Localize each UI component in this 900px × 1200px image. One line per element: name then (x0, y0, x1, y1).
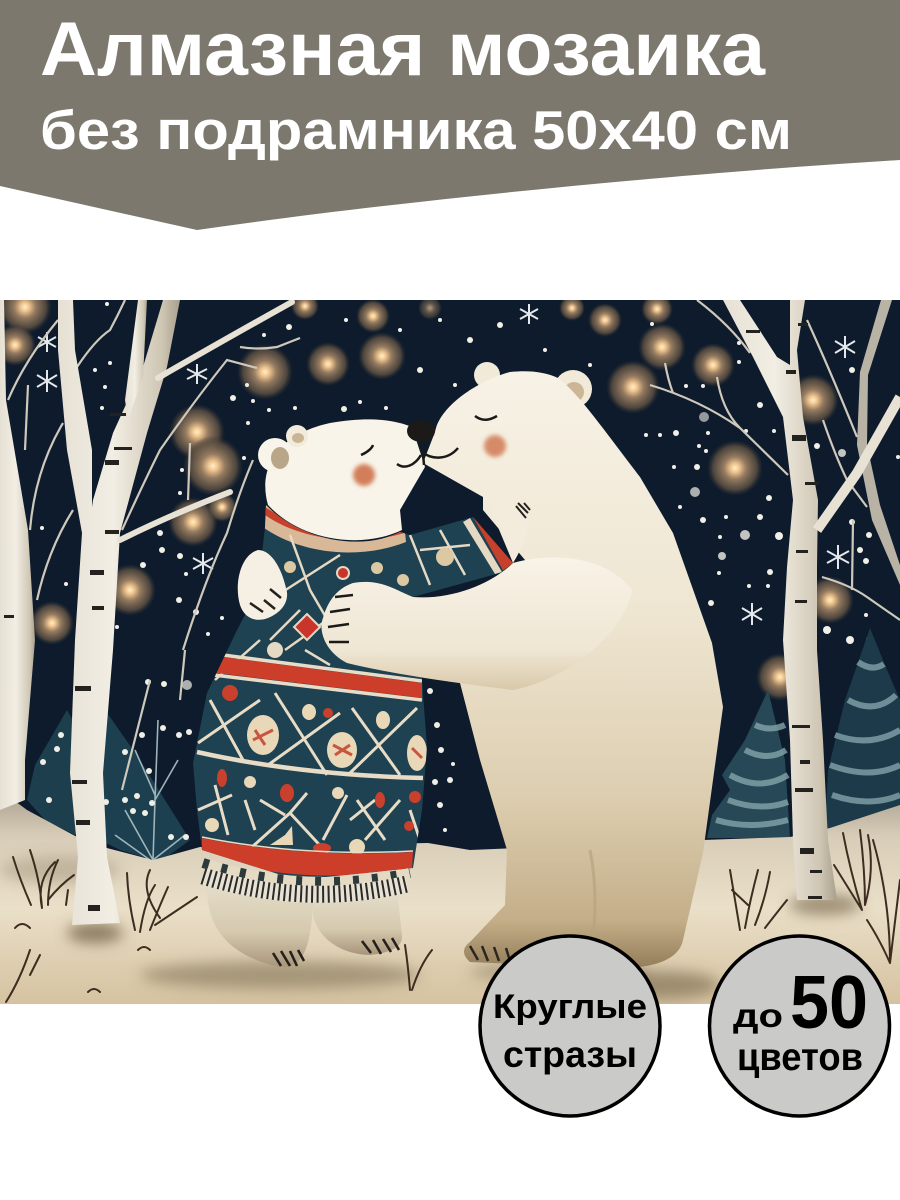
small bear (193, 419, 530, 967)
ground shadows (0, 856, 861, 999)
snowy ground (0, 790, 900, 1004)
red band (216, 657, 422, 698)
sweater hem band (278, 868, 409, 880)
small bear mouth (397, 455, 421, 467)
big bear foot claws (470, 946, 510, 961)
flowers (217, 685, 421, 853)
thick left branches (120, 302, 292, 540)
badge: up to 50 colours: цветов (737, 1036, 863, 1079)
medallions (247, 715, 279, 755)
crossing vines (198, 693, 420, 853)
sweater fringe (203, 876, 407, 894)
thin grey tree (857, 300, 900, 585)
title: Алмазная мозаика (40, 7, 766, 92)
badge: up to 50 colours: до (733, 997, 783, 1034)
big bear paw claws (328, 595, 353, 642)
badge: round rhinestones (480, 936, 660, 1116)
collar (260, 503, 406, 552)
product illustration: two polar bears hugging in a winter forest (0, 280, 900, 1004)
right limb (817, 397, 900, 530)
fir trees (27, 628, 900, 862)
sweater (193, 503, 516, 894)
bare shrubs and twigs (6, 830, 900, 1002)
badge: round rhinestones: Круглые (493, 988, 647, 1026)
bark marks (4, 323, 822, 911)
badge: up to 50 colours (710, 936, 890, 1116)
birch trees (0, 300, 900, 925)
big bear arm (321, 557, 632, 690)
small bear near paw (238, 550, 287, 620)
birch thin branches (8, 300, 900, 790)
lower red band (202, 838, 413, 876)
upper pattern (215, 530, 470, 680)
main left birch (58, 300, 180, 925)
small bear cheek (353, 464, 375, 486)
middle stripe (197, 752, 423, 778)
badge: up to 50 colours: 50 (790, 960, 868, 1044)
subtitle: без подрамника 50х40 см (40, 99, 792, 161)
cuff (473, 517, 513, 570)
main right birch (723, 300, 837, 900)
small bear far paw (498, 528, 519, 563)
snowflakes (37, 304, 855, 625)
big bear body (423, 362, 723, 968)
small bear head (265, 419, 425, 540)
glowing lights (0, 280, 854, 701)
night sky (4, 300, 900, 860)
small bear eye (361, 445, 373, 455)
small bear legs (208, 899, 313, 967)
header banner (0, 0, 900, 230)
falling snow (40, 302, 900, 644)
big bear face (407, 416, 506, 465)
badge: round rhinestones: стразы (503, 1034, 637, 1075)
